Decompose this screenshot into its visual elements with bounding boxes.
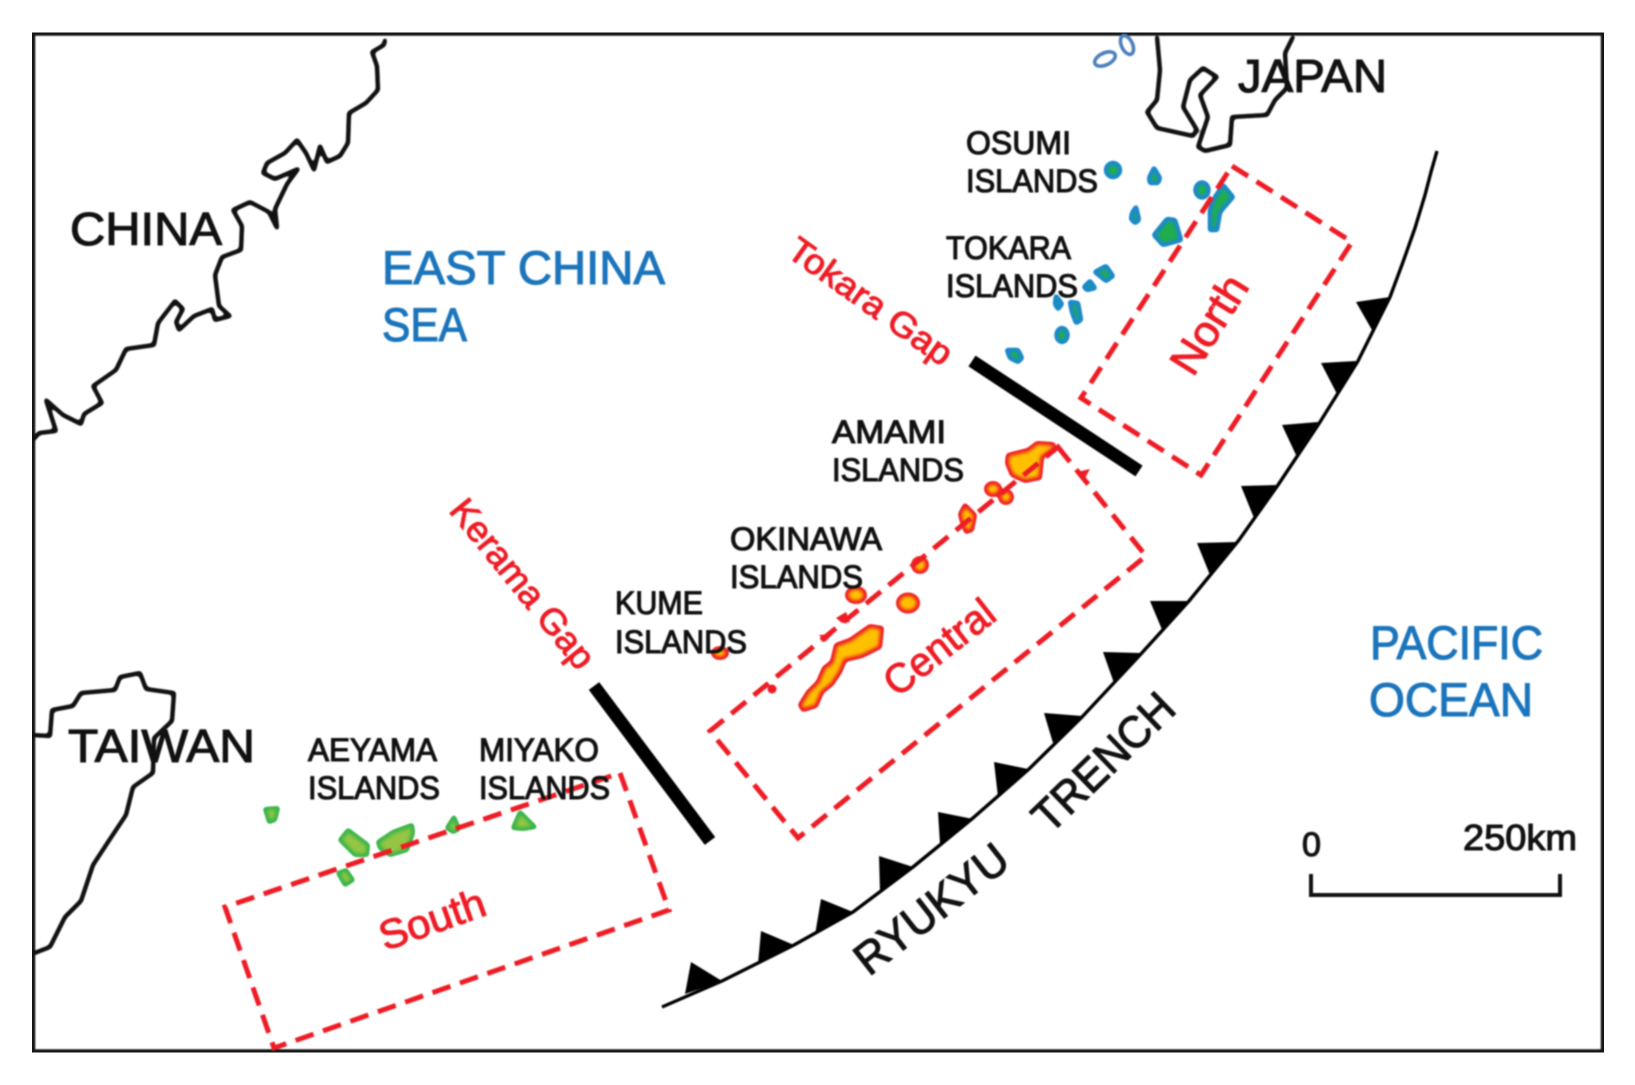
label: Aeyama Islands bbox=[308, 732, 440, 806]
label: Tokara Islands: TOKARA bbox=[946, 230, 1072, 266]
label: Central: Central bbox=[874, 589, 1004, 705]
islands outlined north of Osumi bbox=[1092, 34, 1136, 69]
Amami, Okinawa and Kume island group bbox=[713, 443, 1055, 710]
Tokara Gap line bbox=[972, 361, 1139, 471]
label: Okinawa Islands bbox=[730, 521, 883, 595]
coastline: Taiwan bbox=[32, 673, 174, 954]
Central segment box bbox=[710, 447, 1146, 838]
North segment box bbox=[1081, 166, 1352, 475]
label: Kerama Gap: Kerama Gap bbox=[442, 490, 604, 677]
South segment box bbox=[225, 773, 669, 1048]
label: East China Sea: SEA bbox=[382, 298, 468, 351]
Osumi and Tokara island group bbox=[1007, 163, 1233, 362]
label: South: South bbox=[373, 879, 492, 959]
label: Aeyama Islands: AEYAMA bbox=[308, 732, 438, 768]
label: Kume Islands: KUME bbox=[615, 585, 703, 621]
label: Amami Islands: AMAMI bbox=[832, 414, 946, 450]
Aeyama and Miyako island group bbox=[265, 808, 535, 885]
label: Miyako Islands: MIYAKO bbox=[479, 732, 599, 768]
scale bar bbox=[1311, 874, 1560, 895]
coastline: China bbox=[32, 40, 385, 441]
label: Tokara Gap: Tokara Gap bbox=[780, 230, 960, 374]
label: Taiwan: TAIWAN bbox=[68, 720, 255, 772]
label: Osumi Islands bbox=[966, 125, 1098, 199]
label: China: CHINA bbox=[70, 203, 222, 255]
label: Tokara Islands: ISLANDS bbox=[946, 268, 1078, 304]
label: Pacific Ocean: OCEAN bbox=[1369, 673, 1533, 726]
label: North: North bbox=[1161, 266, 1259, 383]
label: East China Sea bbox=[382, 241, 666, 351]
label: Kume Islands bbox=[615, 585, 747, 660]
scale label 0: 0 bbox=[1302, 826, 1321, 864]
label: East China Sea: EAST CHINA bbox=[382, 241, 666, 294]
Ryukyu Trench line with teeth bbox=[662, 151, 1437, 1007]
label: Osumi Islands: ISLANDS bbox=[966, 163, 1098, 199]
label: Okinawa Islands: ISLANDS bbox=[730, 559, 863, 595]
label: Miyako Islands bbox=[479, 732, 610, 806]
label: Amami Islands: ISLANDS bbox=[832, 452, 964, 488]
label: Pacific Ocean: PACIFIC bbox=[1370, 616, 1543, 669]
label: Miyako Islands: ISLANDS bbox=[479, 770, 610, 806]
label: Aeyama Islands: ISLANDS bbox=[308, 770, 440, 806]
label: Pacific Ocean bbox=[1369, 616, 1543, 726]
label: Ryukyu: RYUKYU bbox=[844, 833, 1019, 985]
label: Amami Islands bbox=[832, 414, 964, 488]
label: Okinawa Islands: OKINAWA bbox=[730, 521, 883, 557]
label: Kume Islands: ISLANDS bbox=[615, 624, 747, 660]
label: Japan: JAPAN bbox=[1238, 50, 1387, 102]
label: Osumi Islands: OSUMI bbox=[966, 125, 1071, 161]
coastline: Japan bbox=[1147, 37, 1293, 151]
small red islets bbox=[768, 469, 1090, 694]
label: Tokara Islands bbox=[946, 230, 1078, 304]
label: Trench: TRENCH bbox=[1022, 682, 1185, 842]
scale label 250km: 250km bbox=[1463, 817, 1577, 858]
Kerama Gap line bbox=[594, 686, 710, 841]
